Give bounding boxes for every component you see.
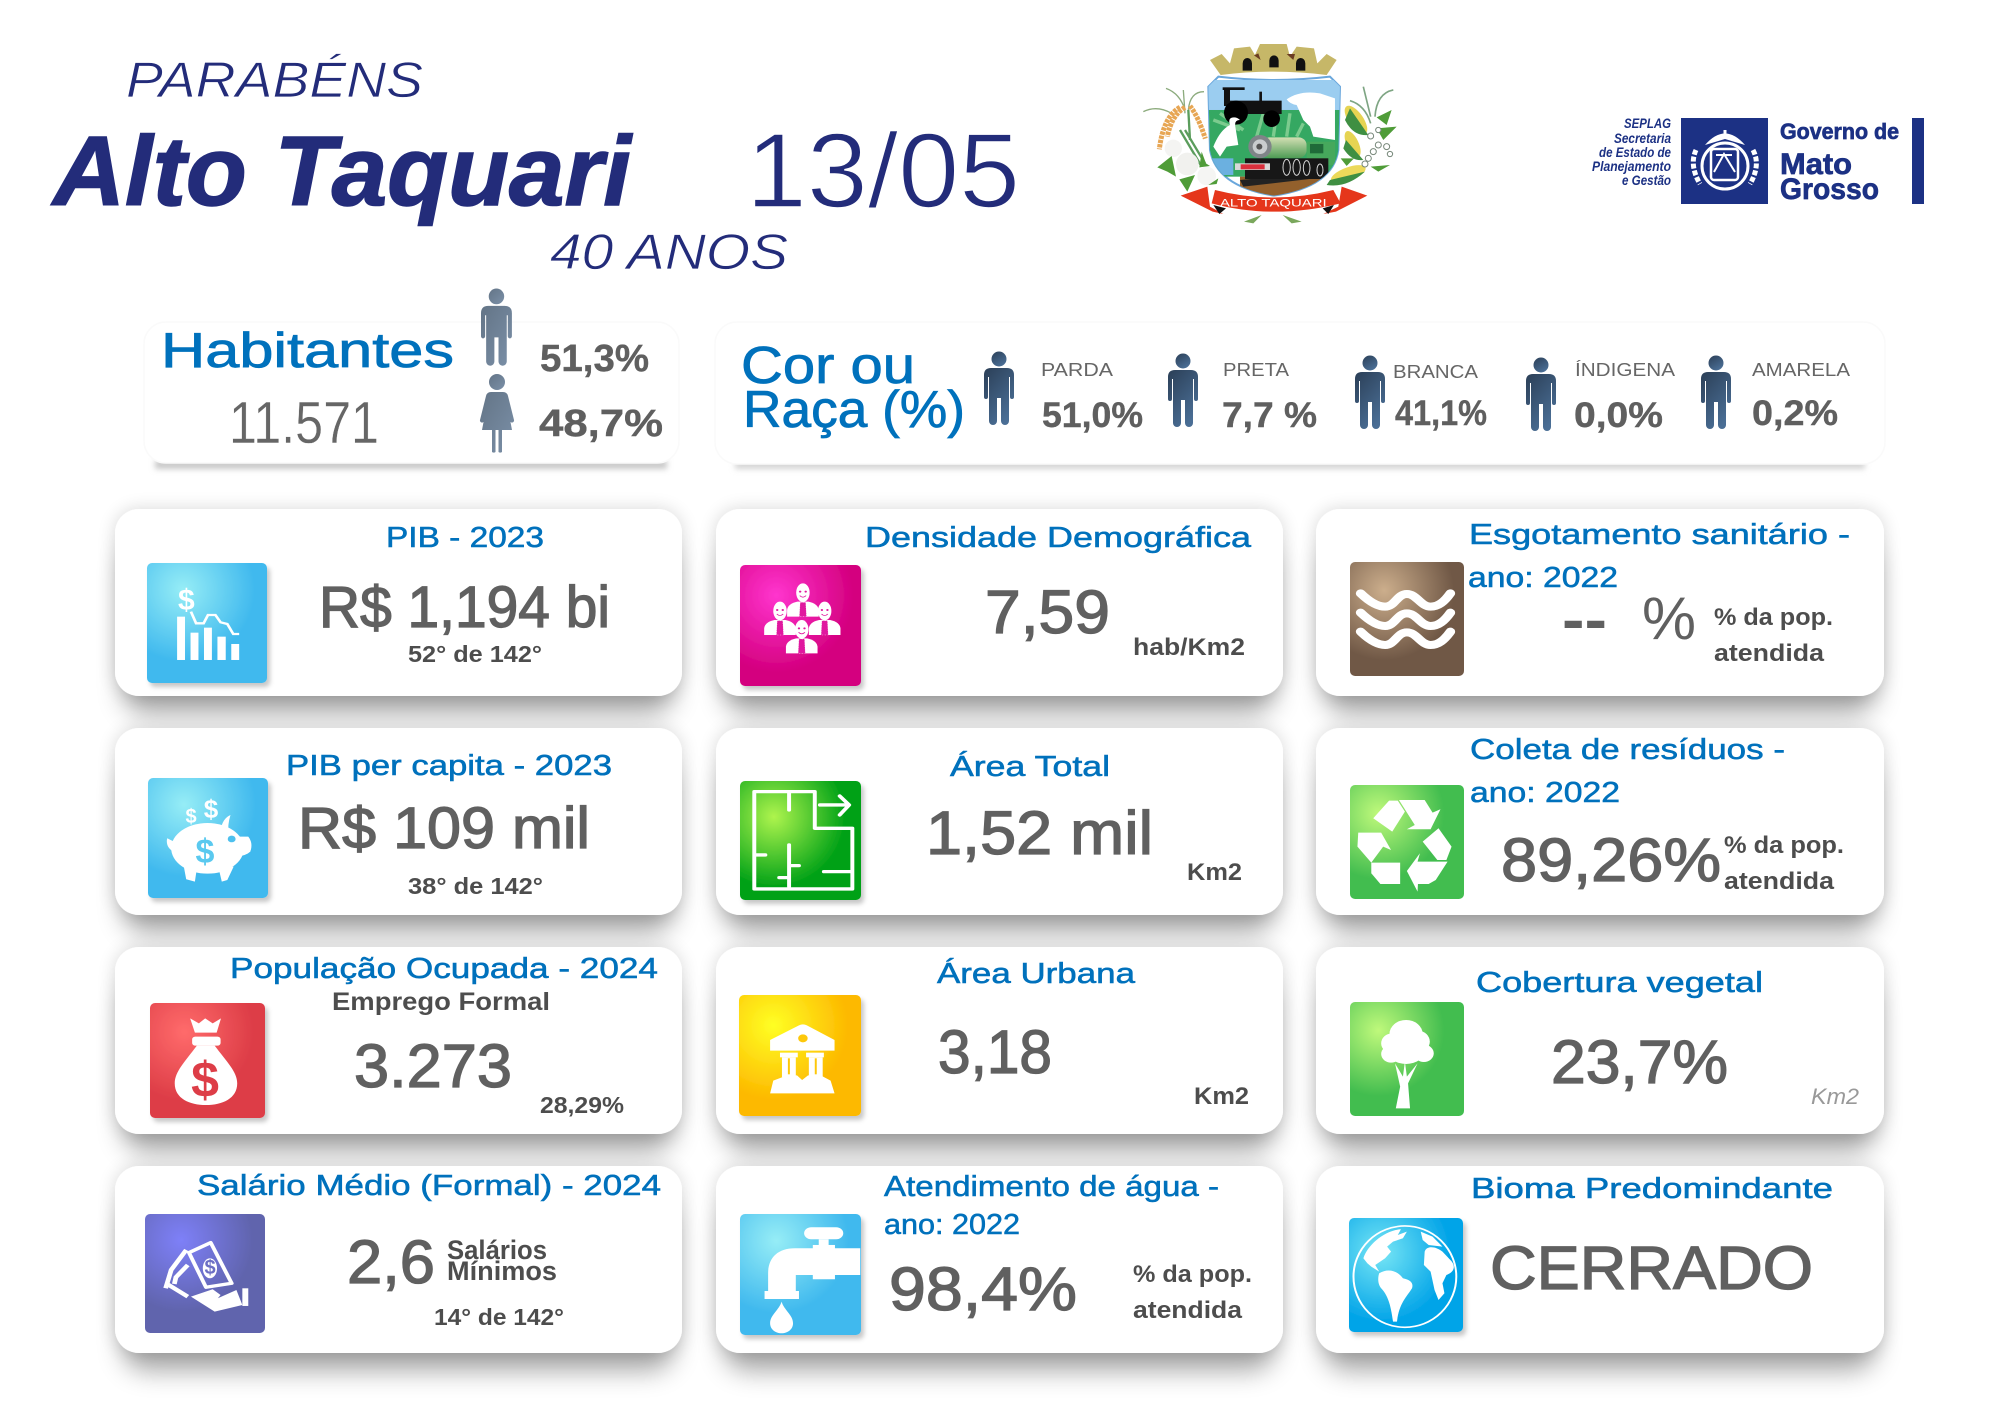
- icon: tree: [1350, 1002, 1464, 1116]
- value: CERRADO: [1490, 1234, 1813, 1302]
- group: indígena: [1526, 358, 1675, 435]
- heading: Densidade Demográfica: [865, 522, 1252, 554]
- value: --: [1562, 586, 1607, 653]
- unit: % da pop.: [1714, 604, 1833, 631]
- state name: Mato: [1780, 148, 1852, 181]
- group: preta: PRETA: [1223, 360, 1289, 380]
- unit: hab/Km2: [1133, 634, 1245, 661]
- group: amarela: AMARELA: [1752, 360, 1850, 380]
- group: parda: 51,0%: [1042, 396, 1143, 435]
- unit: [1714, 604, 1833, 667]
- group: parda: PARDA: [1041, 360, 1113, 380]
- value: habitants: 11.571: [229, 390, 379, 456]
- group: branca: BRANCA: [1393, 362, 1478, 382]
- card: densidade demográfica: [716, 509, 1283, 696]
- heading: [884, 1171, 1219, 1241]
- rank: 52° de 142°: [408, 641, 542, 667]
- title: Alto Taquari: Alto Taquari: [50, 116, 633, 226]
- icon: female: [480, 374, 514, 453]
- agency text: SEPLAG: [1624, 115, 1671, 131]
- heading: Bioma Predomindante: [1471, 1173, 1833, 1205]
- value: R$ 109 mil: [298, 796, 590, 861]
- title: Parabéns: PARABÉNS: [126, 52, 423, 108]
- card: área total: [716, 728, 1283, 915]
- value: 3,18: [938, 1018, 1052, 1086]
- icon: people: [740, 565, 861, 686]
- unit: [447, 1235, 557, 1286]
- icon: public building: [739, 995, 861, 1116]
- rank: 38° de 142°: [408, 873, 543, 899]
- share: 28,29%: [540, 1092, 624, 1118]
- icon: money bag: $: [191, 1052, 219, 1108]
- agency text: Planejamento: [1592, 158, 1671, 174]
- group: parda: [984, 352, 1143, 435]
- icon: male: [481, 289, 512, 366]
- heading: Cobertura vegetal: [1476, 967, 1763, 999]
- icon: chart: $: [178, 584, 195, 617]
- blue bar: [1912, 118, 1924, 204]
- logo: municipal coat of arms: ALTO TAQUARI: [1220, 198, 1327, 210]
- subtitle: 40 anos: 40 ANOS: [550, 224, 788, 280]
- group: amarela: 0,2%: [1752, 394, 1838, 433]
- state name: Grosso: [1780, 173, 1879, 206]
- heading: cor ou raça: [741, 337, 965, 439]
- heading: Coleta de resíduos -: [1470, 734, 1785, 766]
- value: R$ 1,194 bi: [319, 575, 610, 640]
- group: indígena: 0,0%: [1574, 396, 1663, 435]
- panel: habitantes: [144, 289, 679, 469]
- icon: money bag: [150, 1003, 265, 1118]
- heading: habitantes: Habitantes: [161, 324, 454, 378]
- heading: PIB - 2023: [386, 522, 544, 554]
- card: PIB per capita: [115, 728, 682, 915]
- agency text: de Estado de: [1599, 144, 1671, 160]
- icon: faucet: [740, 1214, 861, 1335]
- card: população ocupada: [115, 947, 682, 1134]
- heading: Área Total: [950, 750, 1110, 783]
- value: 2,6: [347, 1228, 435, 1296]
- group: branca: [1355, 356, 1487, 433]
- icon: waves: [1350, 562, 1464, 676]
- value: 1,52 mil: [926, 799, 1153, 867]
- unit: Salários: [447, 1235, 547, 1265]
- unit: [1133, 1261, 1252, 1324]
- icon: hand with money: [145, 1214, 265, 1333]
- rank: 14° de 142°: [434, 1304, 564, 1330]
- heading: ano: 2022: [1470, 777, 1620, 809]
- group: preta: 7,7 %: [1222, 396, 1317, 435]
- unit: % da pop.: [1133, 1261, 1252, 1288]
- value: 89,26%: [1501, 826, 1721, 894]
- icon: recycling: [1350, 785, 1464, 899]
- value: 23,7%: [1551, 1028, 1728, 1096]
- heading: [1470, 734, 1785, 809]
- icon: piggy bank: $: [185, 806, 197, 828]
- panel: cor ou raça: [715, 322, 1885, 469]
- percent sign: %: [1642, 585, 1696, 652]
- agency text: e Gestão: [1622, 172, 1671, 188]
- unit: Km2: [1811, 1084, 1859, 1109]
- group: indígena: ÍNDIGENA: [1575, 360, 1675, 380]
- unit: Km2: [1194, 1083, 1249, 1110]
- heading: cor ou raça: Cor ou: [741, 337, 915, 395]
- subheading: Emprego Formal: [332, 988, 550, 1016]
- icon: chart: [147, 563, 267, 683]
- value: 7,59: [985, 578, 1110, 646]
- card: salário médio: [115, 1166, 682, 1353]
- heading: PIB per capita - 2023: [286, 750, 612, 782]
- male percentage: 51,3%: [540, 338, 649, 380]
- icon: globe: [1349, 1218, 1463, 1332]
- female percentage: 48,7%: [539, 403, 663, 445]
- card: cobertura vegetal: [1316, 947, 1884, 1134]
- icon: floor plan: [740, 781, 861, 900]
- group: amarela: [1701, 356, 1850, 433]
- heading: População Ocupada - 2024: [230, 953, 658, 985]
- heading: Salário Médio (Formal) - 2024: [197, 1170, 661, 1202]
- unit: Km2: [1187, 859, 1242, 886]
- heading: Atendimento de água -: [884, 1171, 1219, 1203]
- icon: piggy bank: $: [196, 833, 215, 871]
- icon: hand with money: $: [204, 1257, 216, 1279]
- icon: piggy bank: $: [204, 794, 219, 824]
- logo: municipal coat of arms: [1143, 44, 1397, 223]
- heading: Esgotamento sanitário -: [1469, 519, 1850, 551]
- heading: Área Urbana: [937, 957, 1136, 990]
- heading: [1468, 519, 1850, 594]
- state seal: [1681, 118, 1768, 204]
- card: atendimento de água: [716, 1166, 1283, 1353]
- agency text: Secretaria: [1614, 130, 1671, 146]
- heading: cor ou raça: Raça (%): [743, 381, 965, 439]
- card: coleta de resíduos: [1316, 728, 1884, 915]
- value: 98,4%: [889, 1255, 1077, 1323]
- unit: Mínimos: [447, 1256, 557, 1286]
- heading: ano: 2022: [1468, 562, 1618, 594]
- unit: % da pop.: [1724, 832, 1844, 859]
- date: 13/05: [746, 112, 1020, 230]
- card: esgotamento sanitário: [1316, 509, 1884, 696]
- group: branca: 41,1%: [1395, 394, 1487, 433]
- state name: Governo de: [1780, 119, 1899, 144]
- unit: atendida: [1133, 1297, 1243, 1324]
- unit: [1724, 832, 1844, 895]
- agency text: [1592, 115, 1671, 188]
- unit: atendida: [1714, 640, 1825, 667]
- unit: atendida: [1724, 868, 1835, 895]
- card: área urbana: [716, 947, 1283, 1134]
- state name: [1780, 119, 1899, 206]
- icon: piggy bank: [148, 778, 268, 898]
- card: bioma predominante: [1316, 1166, 1884, 1353]
- heading: ano: 2022: [884, 1209, 1020, 1241]
- value: 3.273: [354, 1032, 512, 1100]
- card: PIB: [115, 509, 682, 696]
- logo: SEPLAG Governo de Mato Grosso: [1592, 115, 1924, 206]
- group: preta: [1168, 354, 1317, 435]
